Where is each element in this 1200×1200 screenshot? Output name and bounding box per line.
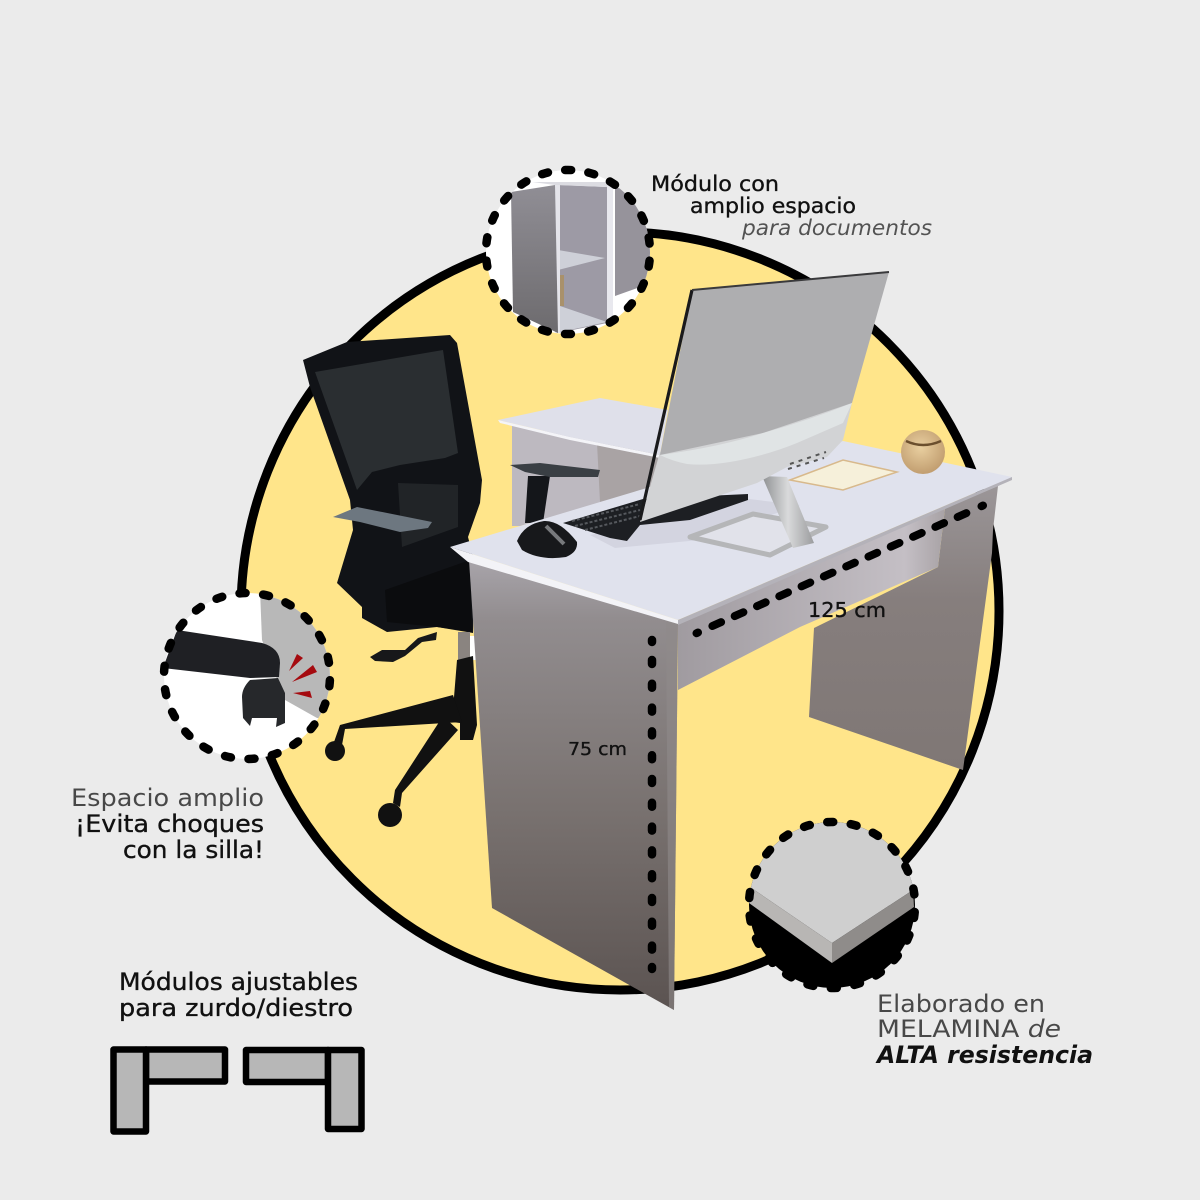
detail circle: chair arm clearance — [163, 590, 345, 759]
monitor ports — [788, 452, 826, 469]
keyboard — [563, 494, 748, 541]
desk left leg front strip — [666, 622, 678, 1010]
detail circle: cabinet module — [486, 170, 660, 334]
text: wide space: Espacio amplio — [71, 784, 264, 812]
text: melamine — [875, 990, 1093, 1069]
dimension line: width — [696, 506, 983, 633]
monitor stand — [690, 476, 826, 555]
caster front — [378, 803, 402, 827]
red impact marks — [289, 654, 317, 698]
text: wide space: con la silla! — [123, 836, 264, 864]
desk shadow under monitor — [590, 498, 800, 548]
dimension line: height — [648, 640, 656, 969]
text: melamine: Elaborado en — [877, 990, 1045, 1018]
wooden ball — [901, 430, 945, 474]
label: 75 cm: 75 cm — [568, 739, 627, 760]
rear desk module — [498, 398, 668, 526]
desk top — [450, 441, 1012, 620]
chair lever — [370, 632, 437, 662]
chair base column — [452, 656, 477, 740]
monitor — [640, 272, 889, 522]
text: cabinet module: para documentos — [741, 216, 932, 240]
yellow circle backdrop — [241, 232, 999, 990]
text: cabinet module — [651, 172, 932, 240]
monitor light band — [660, 403, 852, 465]
mouse — [517, 521, 577, 558]
text: melamine: ALTA resistencia — [875, 1041, 1093, 1069]
desk modesty panel — [678, 508, 945, 690]
chair leg front — [393, 716, 458, 807]
chair upper mesh — [315, 350, 458, 490]
desk right leg — [809, 486, 998, 770]
text: wide space: ¡Evita choques — [75, 810, 264, 838]
monitor lower housing — [640, 403, 852, 522]
detail circle: melamine corner — [740, 820, 925, 988]
icon: left-handed L layout — [114, 1050, 225, 1132]
text: wide space — [71, 784, 264, 864]
monitor back panel — [660, 272, 889, 455]
text: adjustable modules: Módulos ajustables — [119, 968, 358, 996]
monitor edges — [640, 290, 692, 520]
desk left leg — [469, 560, 678, 1010]
chair armrest — [333, 507, 432, 532]
chair lower mesh — [398, 483, 458, 547]
chair far armrest — [510, 463, 600, 523]
chair seat cushion — [385, 560, 472, 632]
office chair — [303, 335, 600, 827]
chair gas cylinder — [458, 632, 476, 662]
text: adjustable modules: para zurdo/diestro — [119, 994, 353, 1022]
label: 125 cm: 125 cm — [808, 598, 886, 622]
text: adjustable modules — [119, 968, 358, 1022]
text: melamine: MELAMINA de — [877, 1015, 1061, 1043]
icon: right-handed L layout — [246, 1050, 362, 1129]
text: cabinet module: amplio espacio — [690, 194, 856, 218]
text: cabinet module: Módulo con — [651, 172, 779, 196]
caster left — [325, 741, 345, 761]
chair back and seat — [303, 335, 482, 633]
mouse pad — [790, 460, 897, 490]
chair leg left — [334, 695, 462, 745]
main desk — [450, 441, 1012, 1010]
